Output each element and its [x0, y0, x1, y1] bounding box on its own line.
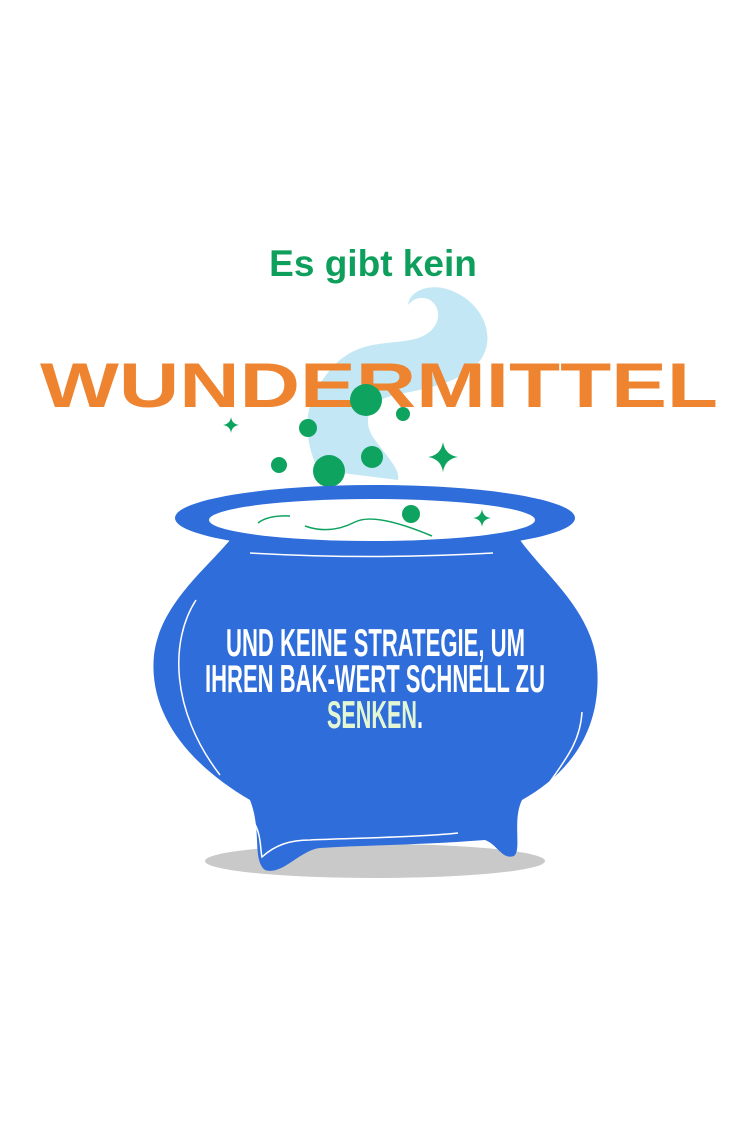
subtitle: Es gibt kein: Es gibt kein: [269, 243, 477, 284]
steam: [307, 287, 487, 480]
pot text: UND KEINE STRATEGIE, UM: [226, 622, 525, 665]
shadow: [205, 844, 545, 878]
title: WUNDERMITTEL: WUNDERMITTEL: [40, 351, 718, 421]
pot text: [205, 622, 545, 737]
pot text: SENKEN.: [327, 694, 423, 737]
cauldron: [153, 485, 598, 871]
bubbles and sparkles: [223, 384, 458, 487]
